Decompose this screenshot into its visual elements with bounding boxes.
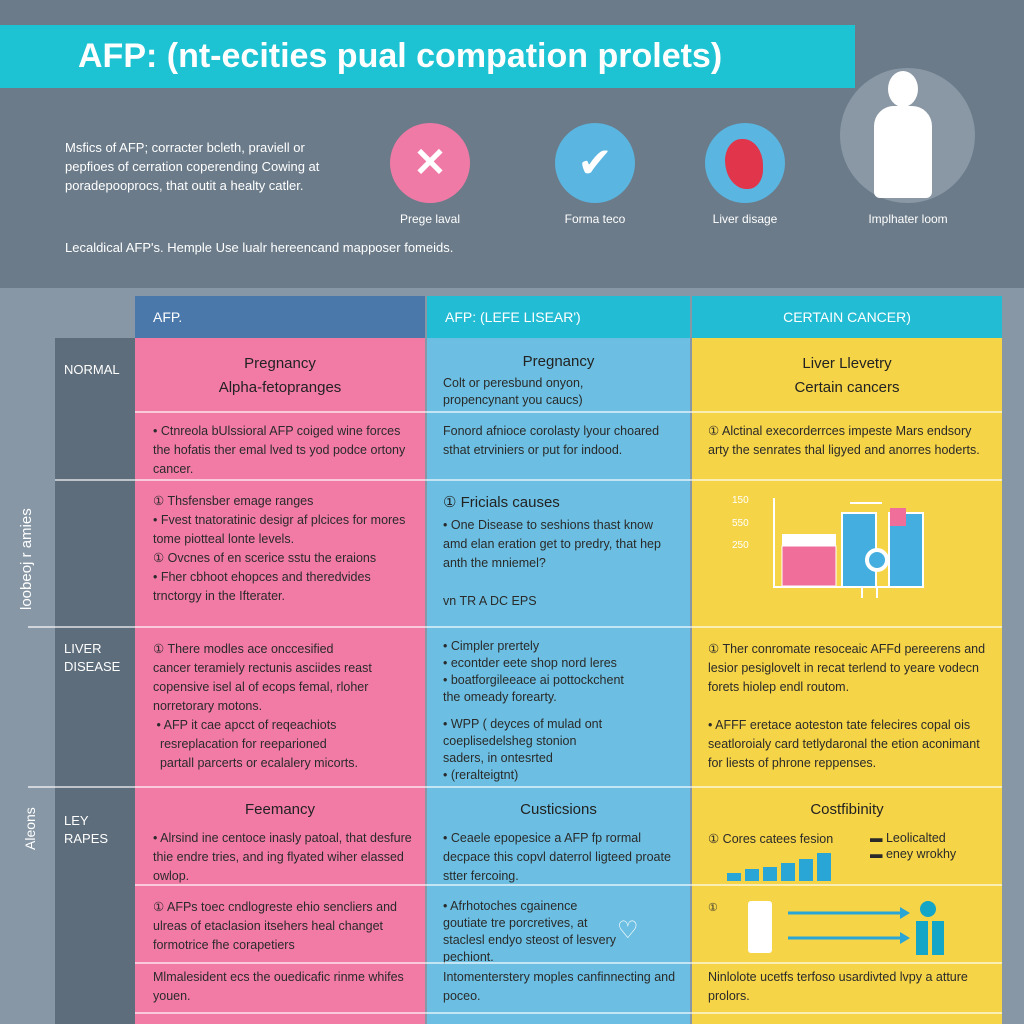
panel: yellow column: ▬ eney wrokhy <box>870 847 956 861</box>
panel: pink column: ① Ovcnes of en scerice sstu the eraions <box>153 551 376 565</box>
panel: yellow column <box>692 338 1002 1024</box>
panel: yellow column: • AFFF eretace aoteston tate felecires copal ois seatloroialy card tetlydaronal the etion aconimant for liests of phrone reppenses. <box>708 718 980 770</box>
row label liver: LIVER <box>64 641 102 656</box>
panel: pink column: Mlmalesident ecs the ouedicafic rinme whifes youen. <box>153 970 404 1003</box>
panel: blue column: coeplisedelsheg stonion <box>443 734 576 748</box>
icon label: Implhater loom <box>868 212 948 226</box>
panel: blue column: Pregnancy <box>523 353 594 370</box>
panel: pink column: • Fvest tnatoratinic desigr af plcices for mores tome piotteal lonte levels. <box>153 513 405 546</box>
icon label: Liver disage <box>713 212 777 226</box>
title banner <box>0 25 855 88</box>
intro text: Msfics of AFP; corracter bcleth, praviell or pepfioes of cerration coperending Cowing at poradepooprocs, that outit a healty catler. <box>65 140 319 193</box>
panel: blue column: the omeady forearty. <box>443 690 557 704</box>
row label ley: RAPES <box>64 831 108 846</box>
header lefe: AFP: (LEFE LISEAR') <box>445 309 581 325</box>
panel: pink column: ① Thsfensber emage ranges <box>153 494 313 508</box>
panel: pink column: Alpha-fetopranges <box>219 379 341 396</box>
panel: blue column: • (reralteigtnt) <box>443 768 518 782</box>
panel: blue column: ① Fricials causes <box>443 494 560 511</box>
header cancer: CERTAIN CANCER) <box>783 309 911 325</box>
panel: blue column <box>427 338 690 1024</box>
panel: blue column: Intomenterstery moples canfinnecting and poceo. <box>443 970 675 1003</box>
panel: blue column: vn TR A DC EPS <box>443 594 537 608</box>
chart <box>732 495 924 598</box>
footnote: Lecaldical AFP's. Hemple Use lualr hereencand mapposer fomeids. <box>65 240 453 255</box>
side label: Aleons <box>22 807 38 850</box>
panel: blue column: propencynant you caucs) <box>443 393 583 407</box>
icon: liver <box>705 123 785 203</box>
icon: pregnancy <box>390 123 470 203</box>
panel: yellow column: ① Ther conromate resoceaic AFFd pereerens and lesior pesiglovelt in recat terlend to yeare vodecn forets hiolep endl routom. <box>708 642 985 694</box>
panel: blue column: saders, in ontesrted <box>443 751 553 765</box>
header lefe <box>427 296 690 338</box>
panel: blue column: • econtder eete shop nord leres <box>443 656 617 670</box>
side label: loobeoj r amies <box>18 508 35 610</box>
panel: pink column: • Ctnreola bUlssioral AFP coiged wine forces the hofatis ther emal lved ts yod podce ortony cancer. <box>153 424 405 476</box>
panel: yellow column: Certain cancers <box>794 379 900 396</box>
icon label: Prege laval <box>400 212 460 226</box>
arrows graphic <box>708 901 944 955</box>
panel: blue column: Colt or peresbund onyon, <box>443 376 583 390</box>
panel: pink column: • Alrsind ine centoce inasly patoal, that desfure thie endre tries, and ing flyated wiher elassed owlop. <box>153 831 412 883</box>
panel: blue column: • boatforgileeace ai pottockchent <box>443 673 624 687</box>
panel: pink column: • Fher cbhoot ehopces and theredvides trnctorgy in the Ifterater. <box>153 570 371 603</box>
panel: blue column: • Cimpler prertely <box>443 639 539 653</box>
row label liver <box>64 641 120 674</box>
panel: pink column: partall parcerts or ecalalery micorts. <box>160 756 358 770</box>
panel: blue column: • WPP ( deyces of mulad ont <box>443 717 602 731</box>
panel: yellow column: Ninlolote ucetfs terfoso usardivted lvpy a atture prolors. <box>708 970 968 1003</box>
panel: pink column: ① There modles ace onccesified <box>153 642 334 656</box>
title banner: AFP: (nt-ecities pual compation prolets) <box>78 37 722 75</box>
icon: body <box>840 68 975 203</box>
panel: pink column: resreplacation for reeparioned <box>160 737 327 751</box>
panel: yellow column: ▬ Leolicalted <box>870 831 946 845</box>
top section <box>0 0 1024 288</box>
icon label: Forma teco <box>565 212 625 226</box>
arrows graphic: ① <box>708 902 718 914</box>
row label liver: DISEASE <box>64 659 120 674</box>
chart: 250 <box>732 540 749 551</box>
row label normal: NORMAL <box>64 362 120 377</box>
panel: yellow column: ① Cores catees fesion <box>708 832 833 846</box>
panel: blue column: • Ceaele epopesice a AFP fp rormal decpace this copvl daterrol ligteed proate stter fercoing. <box>443 831 671 883</box>
row label ley: LEY <box>64 813 89 828</box>
panel: yellow column: ① Alctinal execorderrces impeste Mars endsory arty the senrates thal ligyed and anorres hoderts. <box>708 424 980 457</box>
left label column <box>55 338 135 1024</box>
icon: check <box>555 123 635 203</box>
panel: blue column: • One Disease to seshions thast know amd elan eration get to predry, that hep anth the mniemel? <box>443 518 661 570</box>
panel: pink column: Pregnancy <box>244 355 316 372</box>
header AFP <box>135 296 425 338</box>
panel: pink column <box>135 338 425 1024</box>
header cancer <box>692 296 1002 338</box>
panel: yellow column: Costfibinity <box>810 801 884 818</box>
chart: 550 <box>732 518 749 529</box>
panel: blue column: ♡ <box>617 917 639 944</box>
panel: blue column: Fonord afnioce corolasty lyour choared sthat etrviniers or put for indood. <box>443 424 659 457</box>
panel: yellow column: Liver Llevetry <box>802 355 892 372</box>
panel: pink column: Feemancy <box>245 801 315 818</box>
bar icons <box>727 853 831 881</box>
panel: pink column: cancer teramiely rectunis asciides reast copensive isel al of ecops femal, rloher norretorary motons. <box>153 661 372 713</box>
panel: pink column: • AFP it cae apcct of reqeachiots <box>156 718 336 732</box>
icon: pregnancy: ✕ <box>413 141 447 185</box>
row label ley <box>64 813 108 846</box>
header AFP: AFP. <box>153 309 182 325</box>
chart: 150 <box>732 495 749 506</box>
row dividers <box>135 411 1002 413</box>
panel: blue column: Custicsions <box>520 801 597 818</box>
panel: blue column: • Afrhotoches cgainence goutiate tre porcretives, at staclesl endyo steost of lesvery pechiont. <box>443 899 616 964</box>
icon: check: ✔ <box>577 139 613 186</box>
panel: pink column: ① AFPs toec cndlogreste ehio sencliers and ulreas of etaclasion itsehers heal changet formotrice fhe corapetiers <box>153 900 397 952</box>
